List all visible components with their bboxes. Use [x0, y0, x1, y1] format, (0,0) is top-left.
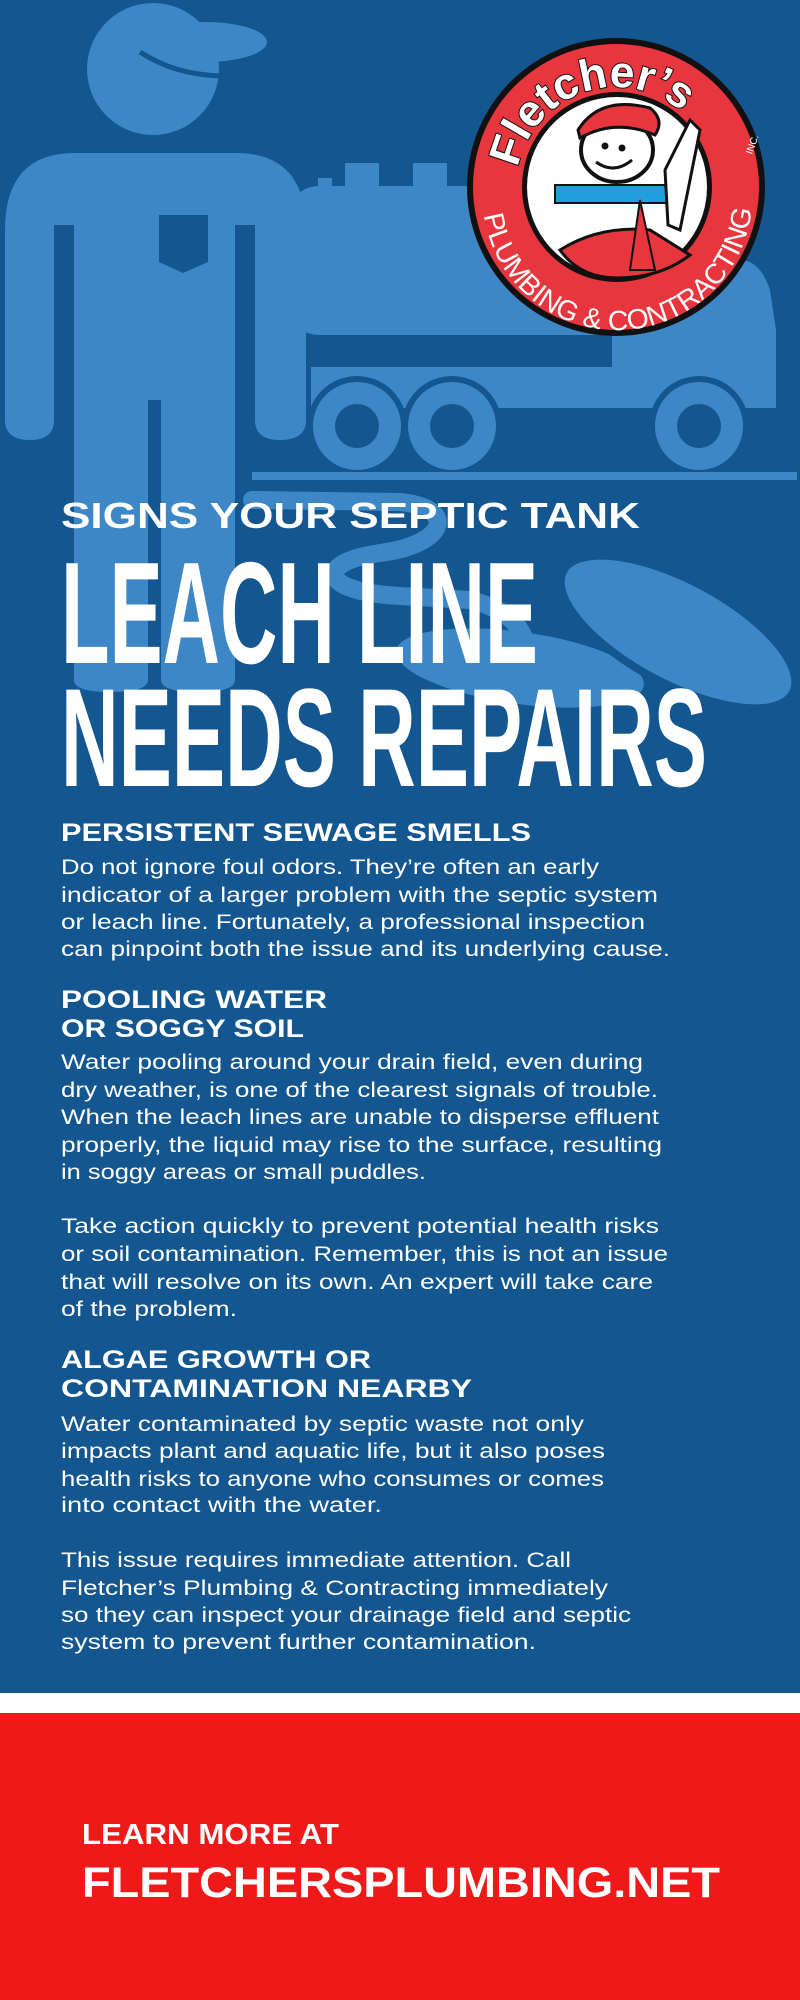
section: algae growth: into contact with the water.	[61, 1494, 382, 1517]
logo: Fletcher's Plumbing & Contracting: PLUMBING & CONTRACTING	[484, 208, 751, 330]
mascot	[555, 104, 700, 278]
section: pooling water: that will resolve on its own. An expert will take care	[61, 1271, 653, 1294]
illustration: hose and manhole	[252, 500, 800, 739]
section: persistent sewage smells: indicator of a larger problem with the septic system	[61, 884, 658, 907]
section: pooling water: Take action quickly to prevent potential health risks	[61, 1215, 659, 1238]
section: algae growth: ALGAE GROWTH OR	[61, 1346, 371, 1374]
section: pooling water: or soil contamination. Remember, this is not an issue	[61, 1243, 668, 1266]
section: algae growth: impacts plant and aquatic life, but it also poses	[61, 1440, 605, 1463]
section: persistent sewage smells	[61, 819, 670, 961]
section: algae growth: so they can inspect your drainage field and septic	[61, 1604, 631, 1627]
title	[61, 495, 707, 816]
footer call to action: FLETCHERSPLUMBING.NET	[82, 1859, 720, 1907]
section: algae growth: system to prevent further contamination.	[61, 1631, 536, 1654]
section: persistent sewage smells: or leach line. Fortunately, a professional inspection	[61, 911, 645, 934]
section: algae growth: Fletcher’s Plumbing & Contracting immediately	[61, 1577, 609, 1600]
section: pooling water: of the problem.	[61, 1298, 237, 1321]
footer call to action: LEARN MORE AT	[82, 1819, 339, 1851]
section: algae growth: Water contaminated by septic waste not only	[61, 1413, 585, 1436]
footer call to action	[82, 1819, 720, 1907]
logo: Fletcher's Plumbing & Contracting	[467, 38, 765, 336]
section: pooling water: Water pooling around your drain field, even during	[61, 1051, 643, 1074]
section: algae growth	[61, 1346, 631, 1654]
section: persistent sewage smells: Do not ignore foul odors. They’re often an early	[61, 856, 600, 879]
title: SIGNS YOUR SEPTIC TANK	[61, 495, 640, 536]
illustration: septic truck	[252, 163, 797, 480]
section: algae growth: This issue requires immediate attention. Call	[61, 1549, 571, 1572]
section: pooling water: dry weather, is one of the clearest signals of trouble.	[61, 1079, 658, 1102]
section: algae growth: CONTAMINATION NEARBY	[61, 1375, 472, 1403]
section: persistent sewage smells: can pinpoint both the issue and its underlying cause.	[61, 938, 670, 961]
section: persistent sewage smells: PERSISTENT SEWAGE SMELLS	[61, 819, 531, 847]
section: algae growth: health risks to anyone who consumes or comes	[61, 1468, 604, 1491]
illustration: worker silhouette	[5, 3, 306, 692]
section: pooling water: OR SOGGY SOIL	[61, 1015, 304, 1043]
section: pooling water: When the leach lines are unable to disperse effluent	[61, 1106, 659, 1129]
section: pooling water: POOLING WATER	[61, 986, 327, 1014]
logo: Fletcher's Plumbing & Contracting: INC.	[744, 133, 762, 156]
section: pooling water: in soggy areas or small puddles.	[61, 1161, 426, 1184]
logo: Fletcher's Plumbing & Contracting: Fletcher’s	[488, 58, 692, 166]
section: pooling water: properly, the liquid may rise to the surface, resulting	[61, 1134, 662, 1157]
section: pooling water	[61, 986, 668, 1321]
